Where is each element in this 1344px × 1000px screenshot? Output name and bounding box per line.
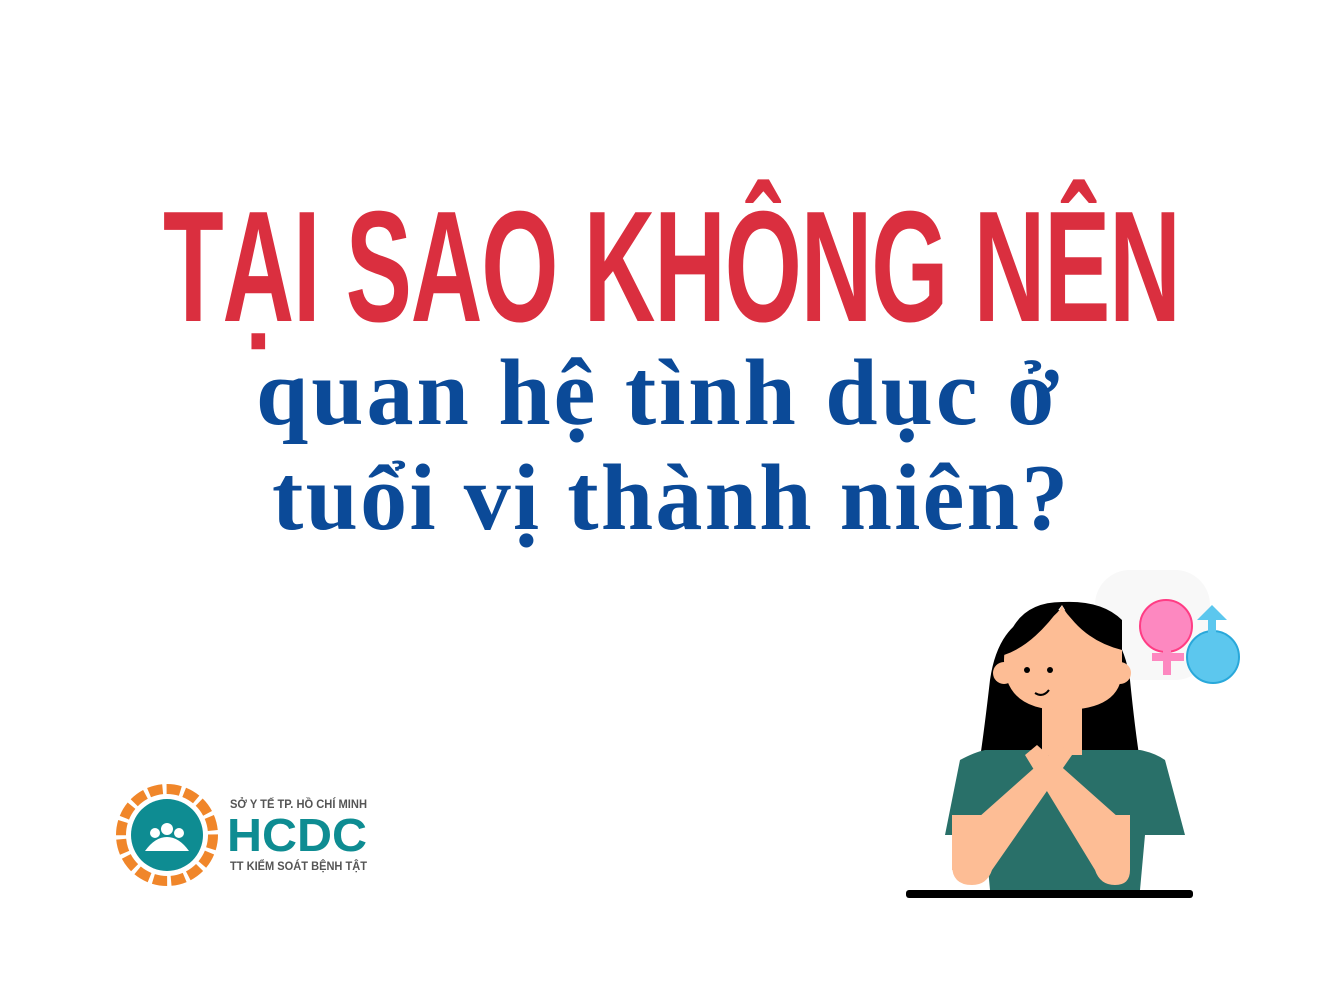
illustration: girl with gender symbols [906,599,1240,898]
subtitle: tuổi vị thành niên? [272,446,1071,550]
table bar [906,890,1193,898]
subtitle [256,341,1071,550]
logo text [227,796,368,873]
icon: male symbol [1187,605,1239,683]
subtitle: quan hệ tình dục ở [256,341,1062,445]
logo text: SỞ Y TẾ TP. HỒ CHÍ MINH [230,796,367,811]
icon: female symbol [1140,600,1192,675]
logo text: TT KIỂM SOÁT BỆNH TẬT [230,858,368,873]
logo text: HCDC [227,809,367,861]
logo [116,784,368,886]
icon: logo emblem [121,789,213,881]
title: TẠI SAO KHÔNG NÊN [163,179,1180,355]
girl [945,602,1185,890]
bubble background [1095,570,1210,680]
